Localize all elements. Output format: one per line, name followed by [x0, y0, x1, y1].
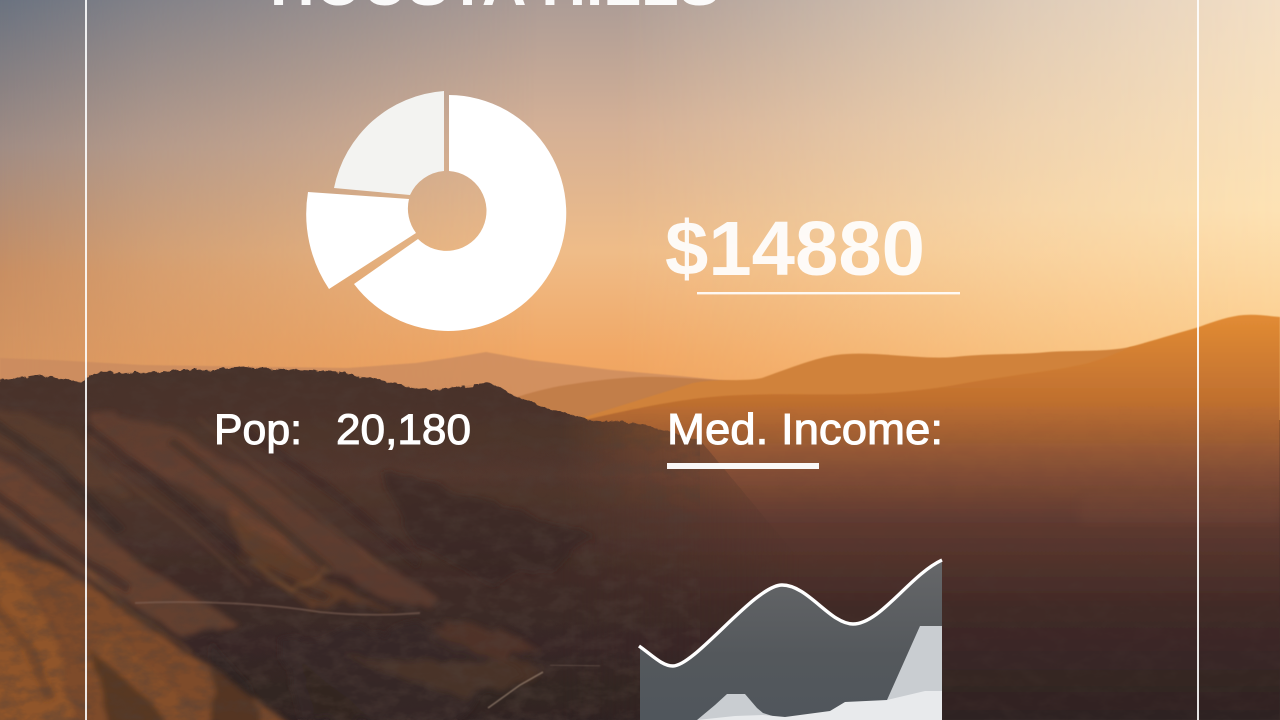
- donut chart: [306, 91, 566, 331]
- area: mid series right: [860, 626, 942, 720]
- slice: exploded left: [306, 192, 416, 289]
- underline: median income: [667, 463, 819, 469]
- label: population: [214, 406, 471, 454]
- label: median income: Med. Income:: [667, 405, 943, 454]
- area: light series: [697, 691, 942, 720]
- area: dark series: [640, 560, 942, 720]
- hillside ridges: [0, 370, 700, 720]
- line: income trend: [639, 560, 942, 666]
- value: income amount: $14880: [665, 206, 925, 292]
- label: population: 20,180: [336, 406, 471, 454]
- slice: upper left: [334, 91, 444, 195]
- background: sunset sky: [0, 0, 1280, 420]
- slice: large: [354, 95, 566, 331]
- label: population: Pop:: [214, 406, 302, 454]
- area chart: [639, 560, 942, 720]
- underline: income amount: [697, 292, 960, 294]
- area: mid series left: [697, 694, 785, 720]
